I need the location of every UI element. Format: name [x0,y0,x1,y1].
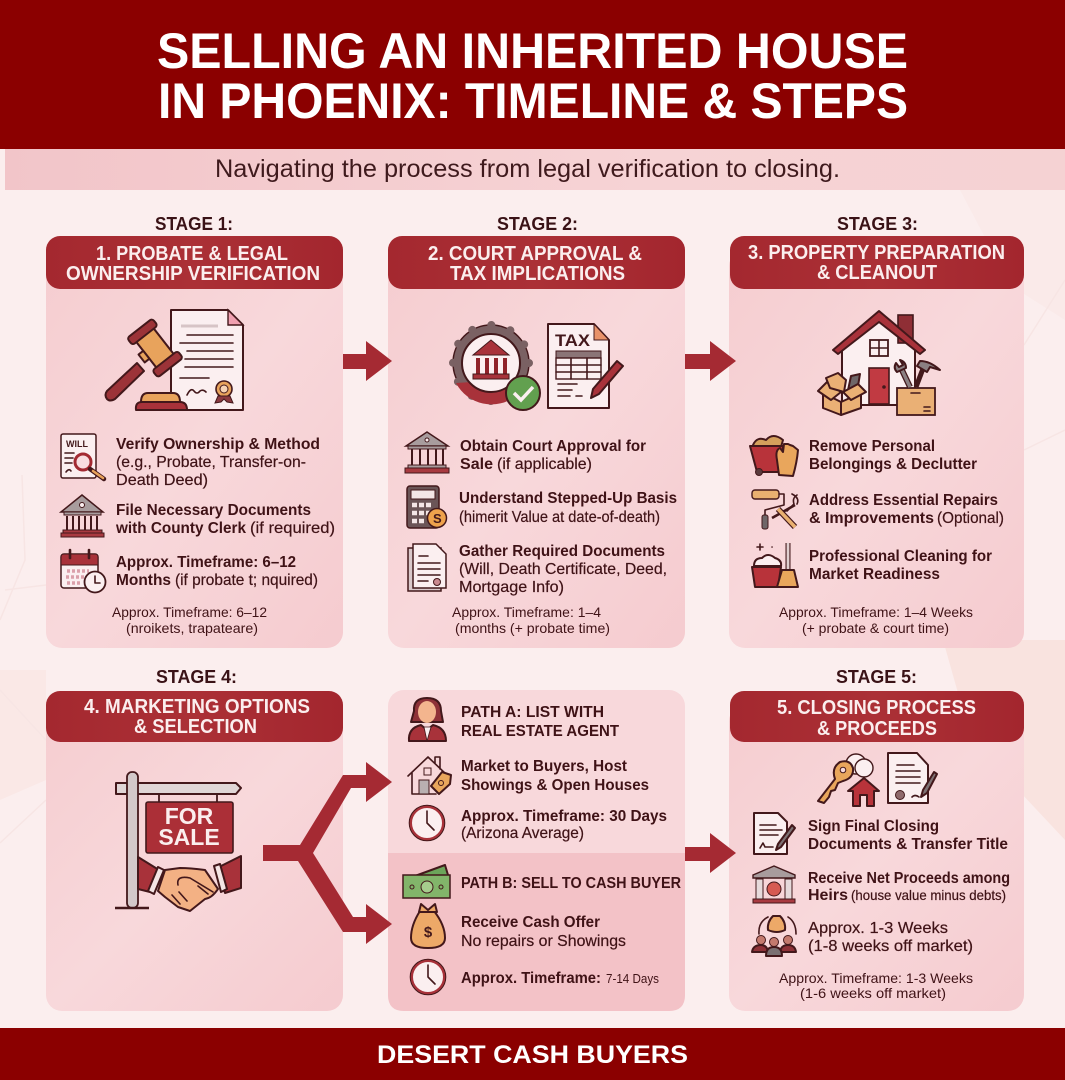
stage 2 header: TAX IMPLICATIONS [450,263,625,285]
item: file documents: (if required) [250,520,335,537]
item: required documents: (Will, Death Certificate, Deed, [459,561,667,578]
timeframe note: Approx. Timeframe: 1–4 Weeks [779,604,973,620]
path B: Receive Cash Offer [461,914,600,931]
stage 1 label: STAGE 1: [155,214,233,234]
icon: courthouse [405,432,449,473]
item: stepped-up basis: Understand Stepped-Up Basis [459,490,677,507]
item: required documents: Gather Required Documents [459,543,665,560]
path A: Approx. Timeframe: 30 Days [461,808,667,825]
stage 3 header: & CLEANOUT [817,262,937,284]
icon: signing document [754,813,795,854]
item: verify ownership: Verify Ownership & Method [116,436,320,453]
stage 2 label: STAGE 2: [497,214,578,234]
item: remove belongings: Remove Personal [809,438,935,455]
icon: heirs with money bag [752,916,796,956]
path A: PATH A: LIST WITH [461,704,604,721]
item: repairs: & Improvements [809,510,934,527]
item: cleaning [752,543,992,587]
icon: calculator: S [433,511,442,526]
icon: house with tag [408,757,451,794]
item: verify ownership: Death Deed) [116,472,208,489]
item: net proceeds: Receive Net Proceeds among [808,870,1010,887]
icon: for sale sign with handshake: SALE [158,824,220,850]
icon: clock [409,805,445,841]
icon: paint roller and tools [752,490,798,529]
arrow: stage 1 to 2 [343,341,392,381]
title: SELLING AN INHERITED HOUSE [157,23,908,79]
stage 4 header [46,691,343,742]
footer [0,1028,1065,1080]
item: timing and heirs: Approx. 1-3 Weeks [808,920,948,937]
icon: for sale sign with handshake: FOR [165,803,214,829]
icon: banknotes [403,865,450,898]
stage 2 header [388,236,685,289]
icon: clock [410,959,446,995]
path A: REAL ESTATE AGENT [461,723,619,740]
stage 4 header: & SELECTION [134,716,257,738]
icon: bucket and broom [752,543,798,587]
timeframe note: (+ probate & court time) [802,620,949,636]
item: verify ownership: (e.g., Probate, Transfer-on- [116,454,306,471]
timeframe note [452,604,610,636]
item: timeframe: Approx. Timeframe: 6–12 [116,554,296,571]
item: stepped-up basis [407,486,677,528]
stage 1 header [46,236,343,289]
item: file documents: File Necessary Documents [116,502,311,519]
icon: gavel and certificate [106,310,243,410]
timeframe note: (nroikets, trapateare) [126,620,258,636]
panel: stage 3 property preparation [729,214,1024,648]
icon: house with boxes and tools [818,311,940,415]
path B [403,865,681,995]
item: repairs [752,490,1004,529]
item: file documents [61,495,335,537]
item: net proceeds: Heirs [808,887,848,904]
arrow: stage 2 to 3 [685,341,736,381]
stage 1 header: OWNERSHIP VERIFICATION [66,263,320,285]
title [157,23,908,129]
stage 4 header: 4. MARKETING OPTIONS [84,696,310,718]
path A: Showings & Open Houses [461,777,649,794]
timeframe note [779,970,973,1001]
panel: stage 5 closing [729,667,1024,1011]
icon: courthouse [61,495,104,537]
icon: document stack [408,544,446,591]
stage 3 label: STAGE 3: [837,214,918,234]
item: stepped-up basis: (himerit Value at date-of-death) [459,509,660,526]
item: cleaning: Professional Cleaning for [809,548,992,565]
item: court approval: (if applicable) [497,456,592,473]
icon: keys, house and contract [818,753,937,806]
path B: No repairs or Showings [461,933,626,950]
item: timeframe [61,550,318,592]
stage 4 label: STAGE 4: [156,667,237,687]
panel: stage 1 probate [46,214,343,648]
title banner [0,0,1065,149]
subtitle band [5,149,1065,190]
item: timeframe: Months [116,572,171,589]
path B: 7-14 Days [606,971,659,986]
icon: bin and gloves [750,436,798,476]
stage 5 header [730,691,1024,742]
path A [408,698,667,842]
timeframe note [112,604,267,636]
path A: (Arizona Average) [461,825,584,842]
item: repairs: Address Essential Repairs [809,492,998,509]
item: verify ownership [61,434,320,489]
item: cleaning: Market Readiness [809,566,940,583]
panel: selling paths [388,690,685,1011]
icon: real estate agent [409,698,446,741]
arrow: paths to closing [685,833,736,873]
item: remove belongings [750,436,977,476]
timeframe note: Approx. Timeframe: 1-3 Weeks [779,970,973,986]
item: repairs: (Optional) [937,510,1004,527]
panel: stage 4 marketing [46,667,343,1011]
item: court approval: Obtain Court Approval for [460,438,646,455]
timeframe note: Approx. Timeframe: 6–12 [112,604,267,620]
icon: money bag: $ [424,924,433,941]
icon: court seal and tax form: TAX [555,331,591,350]
stage 3 header [730,236,1024,289]
footer: DESERT CASH BUYERS [377,1041,688,1069]
item: file documents: with County Clerk [115,520,246,537]
timeframe note: Approx. Timeframe: 1–4 [452,604,601,620]
item: required documents [408,543,667,596]
item: court approval [405,432,646,473]
icon: for sale sign with handshake [115,772,241,911]
icon: court seal and tax form [453,324,623,410]
panel: stage 2 court approval [388,214,685,648]
path B: Approx. Timeframe: [461,970,601,987]
timeframe note: (1-6 weeks off market) [800,985,946,1001]
title: IN PHOENIX: TIMELINE & STEPS [158,73,908,129]
stage 5 header: & PROCEEDS [817,718,937,740]
stage 5 label: STAGE 5: [836,667,917,687]
item: timing and heirs: (1-8 weeks off market) [808,938,973,955]
item: net proceeds [753,866,1010,904]
item: timing and heirs [752,916,973,956]
item: sign documents: Documents & Transfer Title [808,836,1008,853]
path B: PATH B: SELL TO CASH BUYER [461,875,681,892]
item: sign documents: Sign Final Closing [808,818,939,835]
icon: calculator [407,486,446,528]
stage 1 header: 1. PROBATE & LEGAL [96,243,288,265]
icon: calendar and clock [61,550,106,592]
icon: will and magnifier [61,434,104,479]
icon: bank with coin [753,866,795,903]
item: remove belongings: Belongings & Declutter [809,456,977,473]
arrow: branch to path A and path B [263,762,392,944]
stage 5 header: 5. CLOSING PROCESS [777,697,976,719]
timeframe note: (months (+ probate time) [455,620,610,636]
timeframe note [779,604,973,636]
icon: will and magnifier: WILL [66,439,88,449]
path A: Market to Buyers, Host [461,758,628,775]
subtitle band: Navigating the process from legal verification to closing. [215,155,840,183]
icon: money bag [411,904,445,948]
item: net proceeds: (house value minus debts) [851,887,1006,903]
item: required documents: Mortgage Info) [459,579,564,596]
item: court approval: Sale [460,456,493,473]
item: timeframe: (if probate t; nquired) [175,572,318,589]
stage 3 header: 3. PROPERTY PREPARATION [748,242,1005,264]
item: sign documents [754,813,1008,854]
stage 2 header: 2. COURT APPROVAL & [428,243,642,265]
